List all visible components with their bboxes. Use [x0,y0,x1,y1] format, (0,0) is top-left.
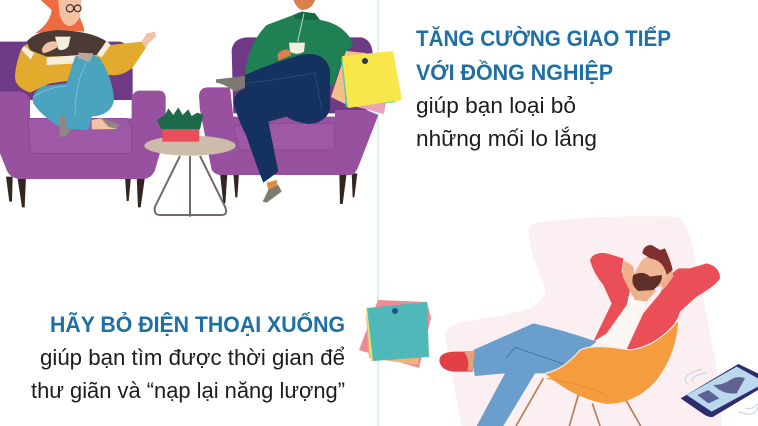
blazer left arm [590,253,630,342]
green sweater [245,12,353,87]
text block: communication [416,93,597,151]
sound waves [685,369,758,414]
table frame [155,156,226,217]
illustration: woman in purple armchair [0,0,166,207]
face [58,0,82,26]
navy trousers [234,54,330,183]
sticky notes: teal [359,300,431,368]
screen [687,367,758,412]
cup [55,37,71,50]
text block: put the phone down [31,345,345,403]
illustration: side table with plant [144,107,236,217]
text block: put the phone down: thư giãn và “nạp lại năng lượng” [31,378,345,403]
arm skin and neck [623,261,673,302]
armchair back [0,42,133,100]
brown yoke [27,30,107,57]
armchair body [199,87,378,175]
chair legs [516,378,641,426]
heading: communication: VỚI ĐỒNG NGHIỆP [416,60,613,85]
text block: communication: những mối lo lắng [416,126,597,151]
sticky notes: yellow [331,51,402,114]
cup [289,43,305,54]
bell [713,377,745,394]
phone body [681,364,758,417]
button [697,390,719,403]
blazer right arm and body [627,263,720,349]
seat cushion [233,123,334,150]
orange chair [545,320,678,404]
table top [144,136,236,156]
foot [92,118,118,129]
raised hand [142,32,156,48]
heading: communication: TĂNG CƯỜNG GIAO TIẾP [416,26,671,51]
jeans [473,323,597,426]
armchair legs [6,177,145,207]
seat cushion [28,118,132,153]
hand on cup [42,41,57,53]
illustration: man in purple armchair [199,0,378,204]
text block: put the phone down: giúp bạn tìm được thời gian để [40,345,345,370]
heading: put the phone down: HÃY BỎ ĐIỆN THOẠI XUỐNG [50,311,345,337]
illustration: phone with notification [681,364,758,417]
armchair legs [220,173,357,204]
hand [277,49,292,61]
plant [157,107,203,129]
face [293,0,315,10]
armchair back [232,37,373,113]
pot [162,129,199,142]
hair [642,245,673,275]
glasses [66,5,81,12]
beard [632,273,662,291]
shirt [597,295,647,349]
illustration: relaxing man on chair [439,216,722,426]
head [634,256,668,290]
jeans [33,55,114,130]
cream stripes [22,41,111,65]
red slipper [439,352,475,372]
background blob [445,216,722,426]
socks and ankle [216,76,245,92]
armchair body [0,91,166,179]
heading: communication [416,26,671,85]
mustard sweater [15,38,146,93]
text block: communication: giúp bạn loại bỏ [416,93,576,118]
hair [35,0,84,33]
